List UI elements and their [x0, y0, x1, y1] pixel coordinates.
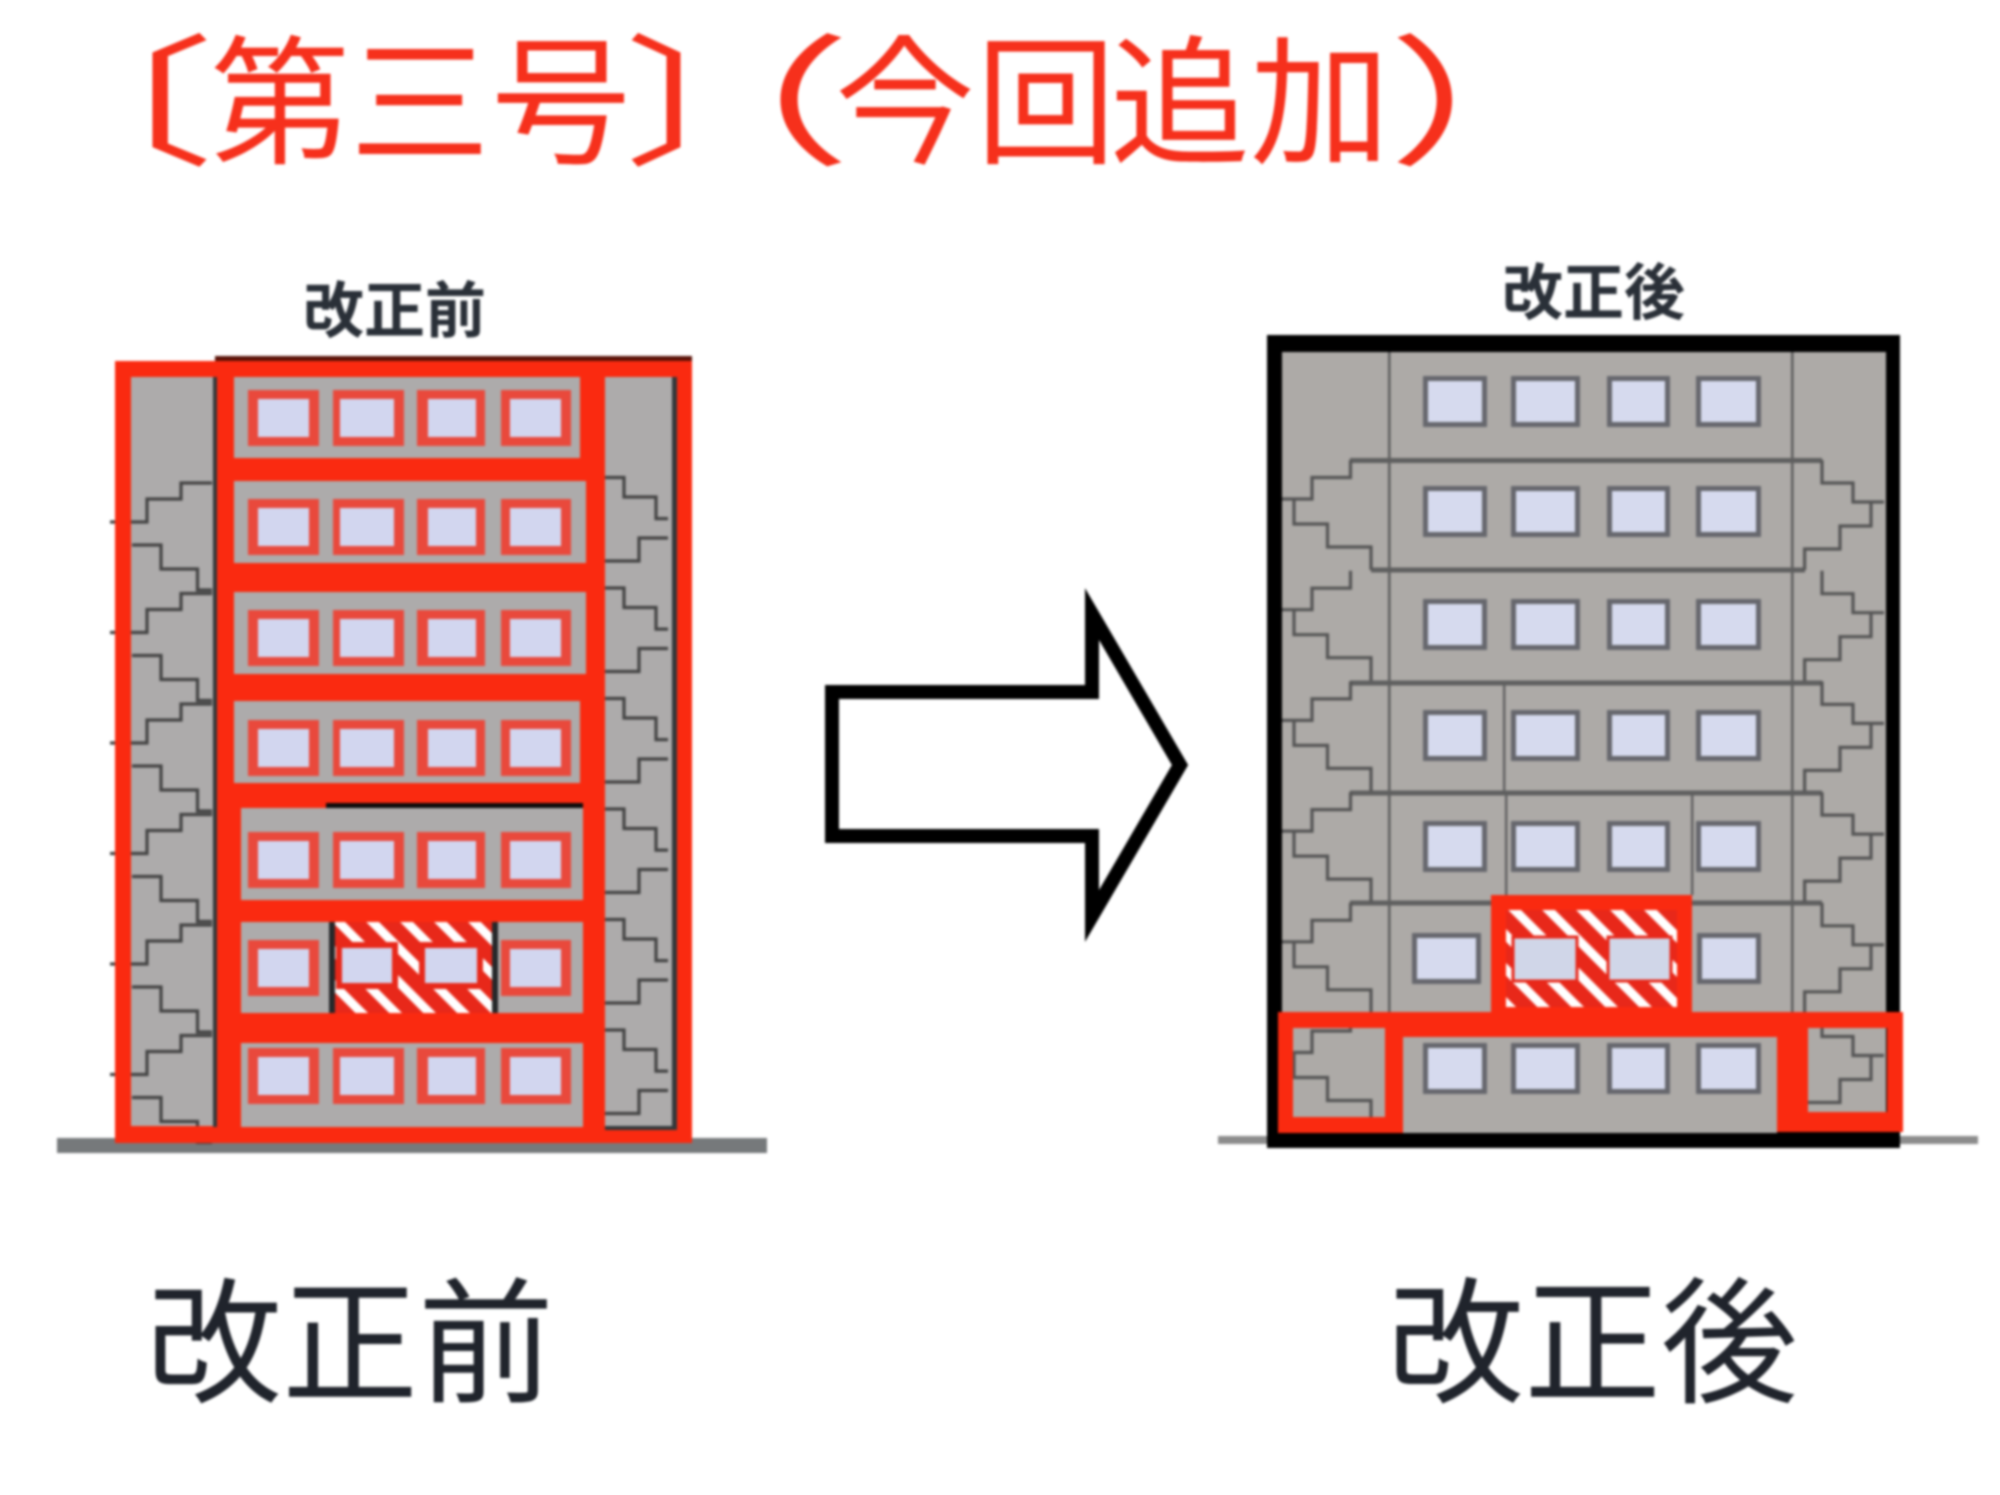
red edges covering line overflow	[115, 361, 692, 1143]
side columns	[131, 377, 672, 1128]
dark structural lines	[213, 377, 677, 1130]
stepped side lines (before)	[110, 478, 668, 1142]
large label: after revision: 改正後	[1387, 1269, 1798, 1422]
ground floor middle panel	[1403, 1037, 1777, 1133]
building body	[1282, 352, 1886, 1132]
panel: after-revision building	[1218, 259, 1978, 1148]
structural lines (after)	[1350, 352, 1822, 1012]
ground line (after)	[1218, 1136, 1978, 1144]
panel: before-revision building	[57, 277, 767, 1153]
title	[0, 26, 1598, 183]
black outer frame	[1267, 335, 1900, 1148]
black line above fifth floor	[326, 803, 583, 808]
windows (before)	[248, 390, 571, 1104]
hatched unit, second floor (after)	[1506, 910, 1677, 1007]
large label: before revision: 改正前	[146, 1269, 554, 1421]
small label: after: 改正後	[1502, 259, 1685, 327]
small label: before: 改正前	[303, 277, 486, 345]
ground line (before)	[57, 1138, 767, 1153]
arrow	[832, 614, 1180, 916]
title: （	[617, 27, 852, 183]
hatched unit, second floor (before)	[248, 922, 571, 1013]
red fire-protection area (after)	[1278, 895, 1903, 1133]
title: 第三号	[210, 26, 631, 183]
windows (after)	[1414, 378, 1758, 1092]
outer red fire-protection area	[115, 361, 692, 1143]
stepped side lines (after)	[1282, 460, 1884, 1124]
title: 〔	[0, 26, 215, 183]
title: ）	[1388, 26, 1598, 183]
title: 〕	[624, 27, 820, 183]
floor panels	[234, 377, 586, 1127]
title: 今回追加	[835, 26, 1390, 183]
